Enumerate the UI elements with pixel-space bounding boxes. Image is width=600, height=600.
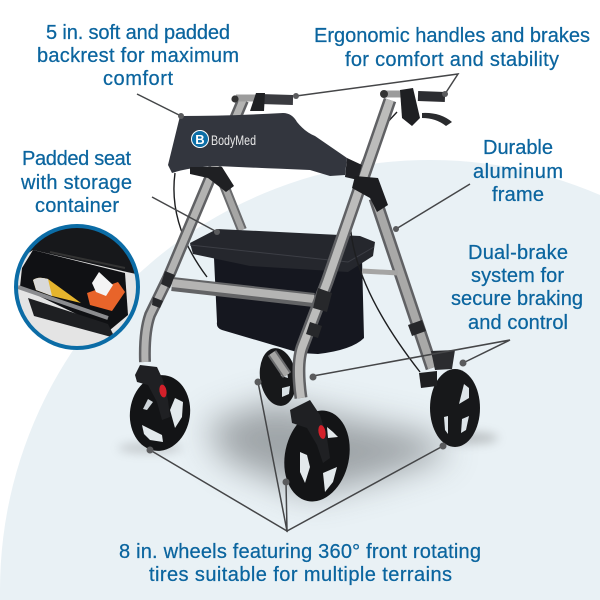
floor shadow	[118, 402, 498, 495]
inset: storage container	[15, 220, 140, 348]
callout: handles and brakes: Ergonomic handles and brakes	[314, 25, 590, 47]
callout: padded seat: container	[35, 195, 119, 217]
left handle	[231, 93, 293, 111]
right handle and brake lever	[380, 88, 452, 126]
front centre wheel	[276, 400, 358, 508]
front left tube	[145, 100, 243, 362]
callout: wheels: tires suitable for multiple terrains	[149, 564, 452, 586]
seat	[190, 229, 375, 272]
callout: padded seat: Padded seat	[22, 148, 131, 170]
backrest	[168, 113, 388, 212]
callout: aluminum frame: frame	[492, 184, 544, 206]
rollator walker	[125, 74, 510, 531]
callout: handles and brakes	[314, 25, 590, 71]
callout: aluminum frame: aluminum	[473, 161, 563, 183]
brake cables	[174, 112, 420, 372]
callout: dual-brake: Dual-brake	[468, 242, 568, 264]
callout: backrest: backrest for maximum	[37, 45, 239, 67]
pointer dots	[146, 91, 466, 486]
backrest: B	[195, 132, 205, 147]
rear left wheel	[256, 346, 300, 408]
callout: backrest: comfort	[103, 68, 173, 90]
horizontal cross bar	[172, 283, 314, 300]
rear left tube	[218, 170, 287, 375]
callout: backrest	[37, 22, 239, 90]
front right tube	[299, 100, 390, 398]
background pale blue arc	[0, 160, 600, 600]
callout: wheels	[119, 541, 481, 586]
logo badge	[192, 130, 208, 148]
callout: dual-brake: secure braking	[451, 288, 583, 310]
pointer lines	[137, 74, 510, 531]
storage bag	[214, 258, 364, 354]
callout: padded seat: with storage	[20, 172, 132, 194]
callout: backrest: 5 in. soft and padded	[46, 22, 230, 44]
callout: aluminum frame: Durable	[483, 137, 553, 159]
tube clamps	[152, 271, 426, 338]
front left wheel	[125, 365, 195, 455]
callout: padded seat	[20, 148, 132, 217]
cup holder and brake	[431, 350, 455, 370]
callout: dual-brake: and control	[468, 312, 568, 334]
callout: dual-brake: system for	[471, 265, 564, 287]
callout: aluminum frame	[473, 137, 563, 206]
right rear wheel	[430, 369, 480, 447]
rear right tube	[375, 198, 432, 368]
callout: handles and brakes: for comfort and stability	[345, 49, 559, 71]
rear cross brace	[362, 271, 398, 273]
callout: dual-brake	[451, 242, 583, 334]
logo wordmark: BodyMed	[211, 132, 256, 148]
callout: wheels: 8 in. wheels featuring 360° front rotating	[119, 541, 481, 563]
